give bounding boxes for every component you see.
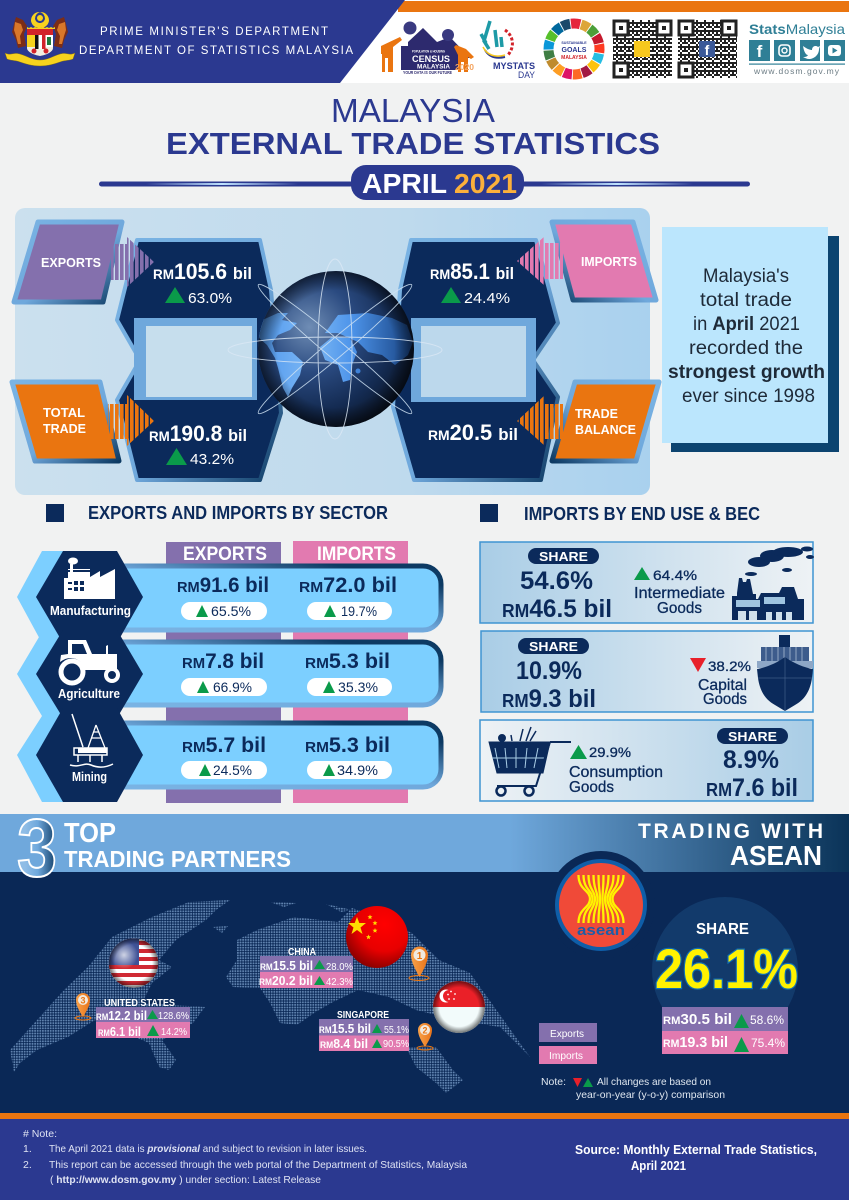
header department text: DEPARTMENT OF STATISTICS MALAYSIA bbox=[79, 45, 353, 57]
column: imports bbox=[293, 541, 408, 803]
panel: capital goods: RM9.3 bil bbox=[502, 685, 596, 713]
heading: trading with asean: TRADING WITH bbox=[638, 820, 823, 843]
row: mining bbox=[105, 723, 441, 787]
hexagon: agriculture bbox=[36, 630, 143, 718]
source bbox=[575, 1143, 817, 1173]
dark panel left bbox=[117, 240, 281, 480]
icon: mystats day logo: DAY bbox=[518, 70, 536, 81]
icon: factory bbox=[732, 546, 814, 620]
footer notes: # Note: bbox=[23, 1128, 57, 1140]
SDG text: MALAYSIA bbox=[561, 55, 587, 61]
icon: China flag bbox=[346, 906, 408, 968]
partner: Singapore: SINGAPORE bbox=[337, 1009, 389, 1021]
SDG text: SUSTAINABLE bbox=[561, 41, 587, 45]
icon: globe bbox=[228, 259, 442, 439]
footer notes: This report can be accessed through the web portal of the Department of Statistics, Malaysia bbox=[49, 1159, 467, 1171]
label: exports bbox=[14, 222, 122, 302]
label: imports bbox=[552, 222, 656, 300]
heading: sector: EXPORTS AND IMPORTS BY SECTOR bbox=[88, 503, 388, 523]
heading: top trading partners: TRADING PARTNERS bbox=[64, 846, 291, 872]
row: manufacturing: 65.5% bbox=[211, 604, 251, 619]
asean share: SHARE bbox=[696, 921, 749, 938]
figure: total trade: 43.2% bbox=[190, 451, 234, 468]
source: April 2021 bbox=[631, 1159, 686, 1173]
icon: QR code facebook bbox=[678, 20, 737, 78]
panel: capital goods: 38.2% bbox=[708, 658, 751, 674]
hexagon: manufacturing: Manufacturing bbox=[50, 603, 131, 618]
panel: consumption goods: Goods bbox=[569, 779, 614, 796]
panel: intermediate goods: SHARE bbox=[539, 549, 588, 564]
partner: Singapore bbox=[319, 1009, 409, 1051]
hexagon: mining: Mining bbox=[72, 769, 107, 784]
heading: end use: IMPORTS BY END USE & BEC bbox=[524, 504, 760, 524]
title: MALAYSIA bbox=[331, 92, 495, 129]
icon: shopping cart bbox=[489, 727, 571, 796]
panel: capital goods: 10.9% bbox=[516, 657, 582, 685]
label: trade balance: BALANCE bbox=[575, 422, 636, 437]
footer notes: 2. bbox=[23, 1159, 32, 1171]
note: yoy: Note: bbox=[541, 1076, 566, 1088]
partner: China: RM20.2 bil bbox=[259, 973, 313, 988]
column: exports bbox=[166, 542, 281, 803]
partner: China: 42.3% bbox=[326, 977, 353, 988]
partner: China bbox=[259, 946, 353, 988]
stats malaysia social block: f bbox=[757, 42, 763, 61]
asean trade values bbox=[662, 1007, 788, 1054]
hexagon: manufacturing bbox=[36, 551, 143, 643]
header department text bbox=[79, 26, 353, 57]
panel: capital goods bbox=[481, 631, 813, 713]
pin: 3 bbox=[75, 993, 91, 1020]
figure: exports: RM105.6 bil bbox=[153, 259, 252, 284]
SDG text: GOALS bbox=[562, 47, 587, 54]
hexagon: mining bbox=[36, 708, 143, 802]
callout: strongest growth: in April 2021 bbox=[693, 314, 800, 335]
dotted world map bbox=[10, 900, 530, 1093]
header banner bbox=[0, 0, 849, 83]
callout: strongest growth: Malaysia's bbox=[703, 266, 789, 287]
partner: United States: RM6.1 bil bbox=[98, 1024, 141, 1039]
label: imports: IMPORTS bbox=[581, 254, 637, 269]
panel: consumption goods: 8.9% bbox=[723, 746, 779, 774]
pin: 2 bbox=[417, 1023, 433, 1050]
icon: SDG wheel bbox=[546, 21, 602, 77]
label: total trade: TOTAL bbox=[43, 405, 85, 420]
icon: QR code website bbox=[613, 20, 672, 78]
label: total trade: TRADE bbox=[43, 421, 86, 436]
figure: imports: RM85.1 bil bbox=[430, 259, 514, 284]
callout: strongest growth: strongest growth bbox=[668, 362, 825, 383]
callout: strongest growth: ever since 1998 bbox=[682, 386, 815, 407]
row: mining: 34.9% bbox=[337, 763, 378, 778]
partner: Singapore: RM15.5 bil bbox=[319, 1021, 371, 1036]
asean trade values: 58.6% bbox=[750, 1013, 784, 1027]
pin: 1 bbox=[409, 946, 429, 980]
pin: 1: 1 bbox=[417, 951, 423, 962]
note: yoy: All changes are based on bbox=[597, 1076, 711, 1088]
icon: census logo bbox=[381, 22, 475, 75]
partner: United States: RM12.2 bil bbox=[96, 1008, 147, 1023]
icon: mystats day logo bbox=[481, 21, 536, 81]
figure: exports bbox=[153, 259, 252, 307]
panel: capital goods: Capital bbox=[698, 677, 747, 694]
row: manufacturing bbox=[105, 566, 441, 630]
label: total trade bbox=[12, 382, 119, 461]
panel: capital goods: SHARE bbox=[529, 639, 578, 654]
row: agriculture: 35.3% bbox=[338, 680, 378, 695]
callout: strongest growth bbox=[662, 227, 839, 452]
row: agriculture: RM7.8 bil bbox=[182, 650, 264, 673]
hexagon: agriculture: Agriculture bbox=[58, 686, 120, 701]
note: yoy: year-on-year (y-o-y) comparison bbox=[576, 1089, 725, 1101]
panel: consumption goods: Consumption bbox=[569, 764, 663, 781]
stats malaysia social block: www.dosm.gov.my bbox=[753, 66, 840, 76]
partner: United States: 14.2% bbox=[161, 1027, 187, 1038]
legend: Imports bbox=[549, 1051, 583, 1062]
panel: headline trade figures bbox=[12, 208, 659, 495]
panel: consumption goods bbox=[480, 720, 813, 802]
panel: sector table bbox=[17, 541, 441, 803]
partner: United States bbox=[96, 997, 190, 1039]
row: agriculture: RM5.3 bil bbox=[305, 650, 390, 673]
stats malaysia social block: StatsMalaysia bbox=[749, 21, 845, 37]
column: exports: EXPORTS bbox=[183, 544, 267, 565]
icon: QR code facebook: f bbox=[705, 42, 710, 58]
stats malaysia social block bbox=[749, 21, 845, 76]
heading: top trading partners bbox=[64, 817, 291, 872]
title: EXTERNAL TRADE STATISTICS bbox=[166, 126, 660, 161]
icon: US flag bbox=[108, 938, 158, 988]
heading: trading with asean bbox=[638, 820, 823, 871]
row: manufacturing: RM72.0 bil bbox=[299, 574, 397, 597]
row: mining: RM5.3 bil bbox=[305, 734, 390, 757]
icon: coat of arms bbox=[5, 12, 75, 66]
footer notes: ( http://www.dosm.gov.my ) under section: Latest Release bbox=[50, 1174, 321, 1186]
icon: Singapore flag bbox=[433, 981, 485, 1033]
asean trade values: RM30.5 bil bbox=[663, 1011, 732, 1028]
figure: trade balance: RM20.5 bil bbox=[428, 420, 518, 445]
panel: intermediate goods: 64.4% bbox=[653, 567, 697, 583]
partner: China: CHINA bbox=[288, 946, 316, 958]
partner: United States: 128.6% bbox=[158, 1011, 189, 1022]
panel: intermediate goods: RM46.5 bil bbox=[502, 595, 612, 623]
icon: ship bbox=[757, 635, 813, 711]
arrow: exports bbox=[111, 237, 154, 287]
partner: Singapore: 90.5% bbox=[383, 1039, 409, 1050]
icon: census logo: POPULATION & HOUSING bbox=[412, 50, 445, 54]
panel: intermediate goods: Goods bbox=[657, 600, 702, 617]
asean trade values: RM19.3 bil bbox=[663, 1034, 728, 1051]
date pill: 2021 bbox=[454, 168, 517, 199]
asean trade values: 75.4% bbox=[751, 1036, 785, 1050]
label: trade balance bbox=[552, 382, 659, 461]
row: mining: RM5.7 bil bbox=[182, 734, 266, 757]
icon: census logo: 2020 bbox=[455, 63, 475, 72]
icon: asean logo: asean bbox=[577, 922, 625, 939]
panel: trading partners bbox=[0, 803, 849, 1113]
label: exports: EXPORTS bbox=[41, 255, 101, 270]
arrow: imports bbox=[517, 236, 563, 286]
icon: mystats day logo: MYSTATS bbox=[493, 61, 535, 72]
row: manufacturing: 19.7% bbox=[341, 604, 377, 619]
row: agriculture: 66.9% bbox=[213, 680, 252, 695]
asean share: 26.1% bbox=[655, 937, 798, 1000]
panel: intermediate goods: 54.6% bbox=[520, 567, 593, 595]
panel: intermediate goods bbox=[480, 542, 814, 623]
row: manufacturing: RM91.6 bil bbox=[177, 574, 269, 597]
panel: consumption goods: 29.9% bbox=[589, 744, 631, 760]
arrow: trade balance bbox=[517, 395, 563, 446]
legend bbox=[539, 1023, 597, 1064]
partner: United States: UNITED STATES bbox=[104, 997, 175, 1009]
pin: 3: 3 bbox=[80, 996, 86, 1006]
footer bbox=[0, 1113, 849, 1200]
date pill bbox=[99, 165, 750, 200]
figure: imports: 24.4% bbox=[464, 290, 510, 307]
hexagon backs bbox=[17, 551, 124, 802]
arrow: total trade bbox=[108, 395, 154, 446]
SDG text bbox=[561, 41, 587, 61]
source: Source: Monthly External Trade Statistics, bbox=[575, 1143, 817, 1157]
figure: total trade bbox=[149, 421, 247, 468]
footer notes: 1. bbox=[23, 1143, 32, 1155]
heading: trading with asean: ASEAN bbox=[730, 840, 822, 871]
footer notes: The April 2021 data is provisional and subject to revision in later issues. bbox=[49, 1143, 367, 1155]
partner: China: 28.0% bbox=[326, 962, 353, 973]
note: yoy bbox=[541, 1076, 725, 1101]
partner: Singapore: 55.1% bbox=[384, 1025, 409, 1036]
column: imports: IMPORTS bbox=[317, 544, 396, 565]
panel: capital goods: Goods bbox=[703, 691, 747, 708]
figure: imports bbox=[430, 259, 514, 307]
dark panel right bbox=[393, 240, 558, 480]
icon: asean logo bbox=[547, 851, 655, 959]
heading: top trading partners: TOP bbox=[64, 817, 116, 848]
three numeral: 3 bbox=[17, 803, 57, 894]
pin: 2: 2 bbox=[422, 1026, 428, 1036]
icon: census logo: MALAYSIA bbox=[417, 64, 451, 70]
partner: China: RM15.5 bil bbox=[260, 958, 313, 973]
date pill: APRIL bbox=[362, 168, 447, 199]
header department text: PRIME MINISTER'S DEPARTMENT bbox=[100, 26, 328, 38]
panel: intermediate goods: Intermediate bbox=[634, 585, 725, 602]
legend: Exports bbox=[550, 1029, 584, 1040]
row: agriculture bbox=[105, 642, 441, 705]
figure: total trade: RM190.8 bil bbox=[149, 421, 247, 446]
callout: strongest growth: recorded the bbox=[689, 338, 803, 359]
footer notes bbox=[23, 1128, 467, 1186]
icon: census logo: CENSUS bbox=[412, 54, 450, 64]
label: trade balance: TRADE bbox=[575, 406, 618, 421]
panel: consumption goods: SHARE bbox=[728, 729, 777, 744]
asean share bbox=[652, 897, 798, 1043]
partner: Singapore: RM8.4 bil bbox=[320, 1036, 368, 1051]
title bbox=[166, 92, 660, 161]
panel: consumption goods: RM7.6 bil bbox=[706, 774, 798, 802]
row: mining: 24.5% bbox=[213, 763, 252, 778]
figure: exports: 63.0% bbox=[188, 290, 232, 307]
icon: census logo: YOUR DATA IS OUR FUTURE bbox=[403, 70, 452, 75]
callout: strongest growth: total trade bbox=[700, 290, 792, 311]
